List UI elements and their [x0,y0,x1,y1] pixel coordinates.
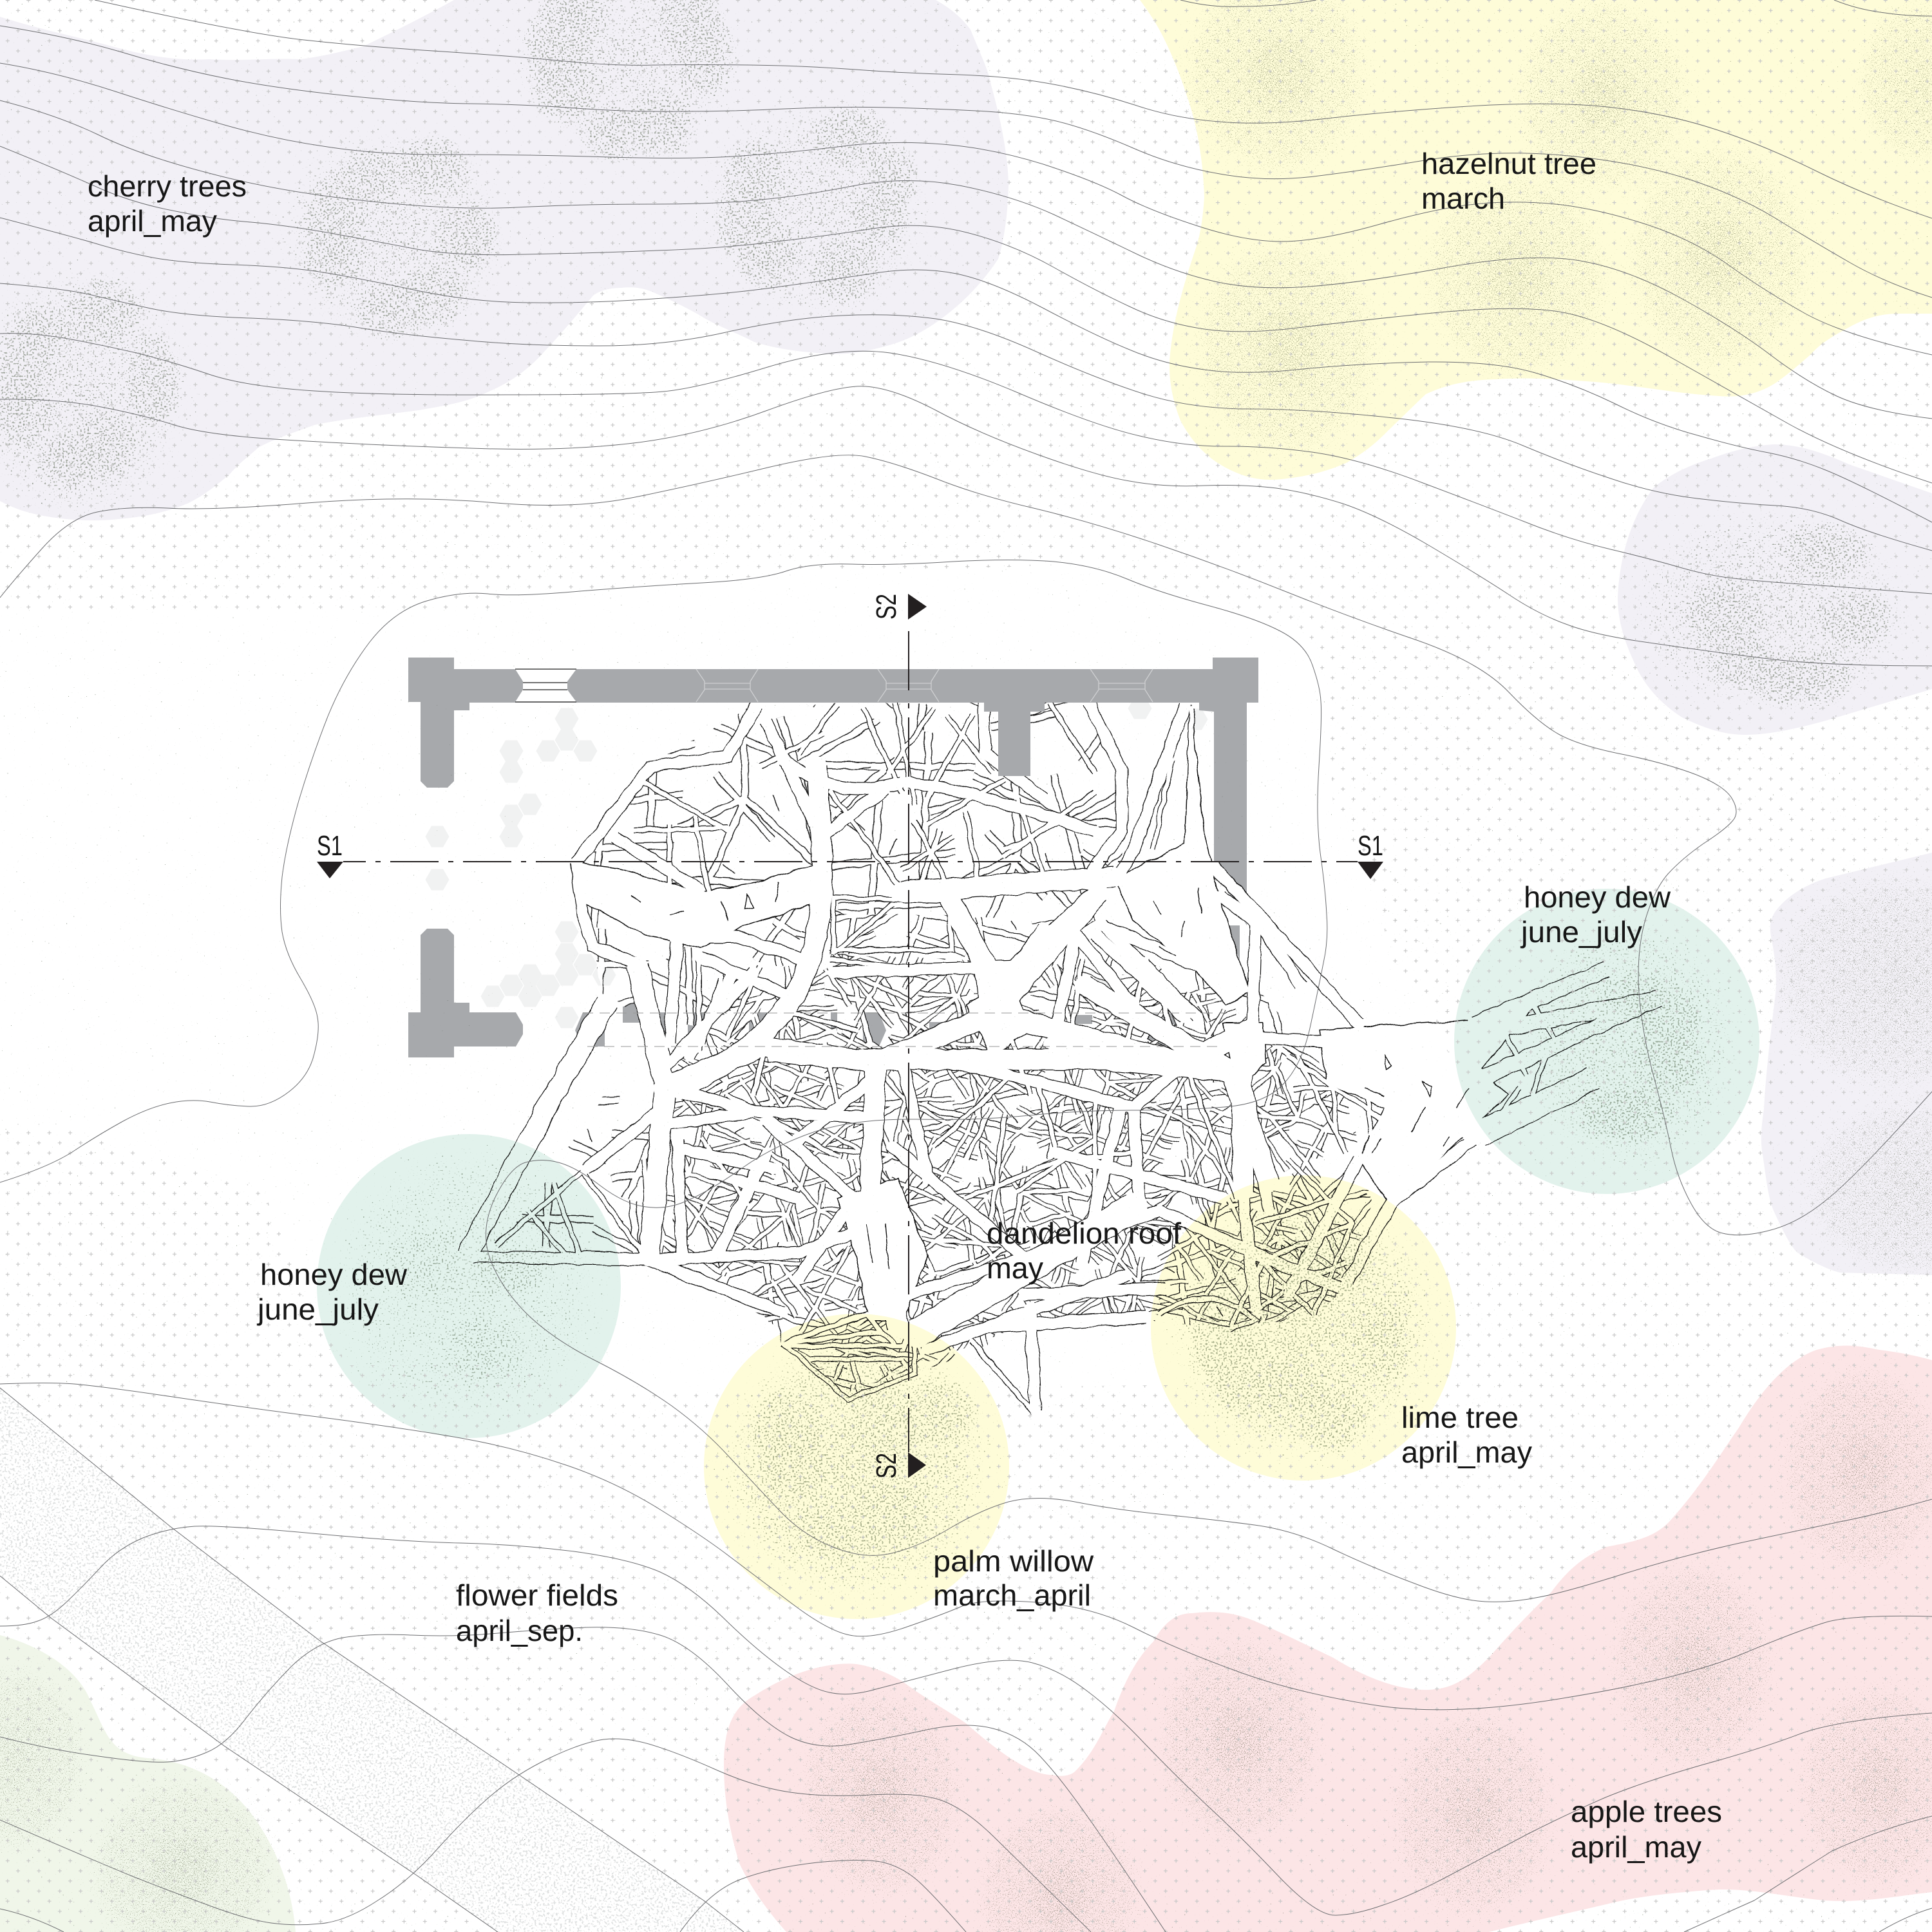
area: cherry trees [0,0,1009,520]
dandelion roof structure [467,702,1658,1413]
palm willow circle [704,1314,1009,1619]
area: lavender patch east upper [1618,444,1932,735]
label: apple trees: april_may [1571,1830,1701,1864]
label S1 west: S1 [317,830,343,862]
multiply circles: honey dew, palm willow, lime tree [317,889,1759,1619]
glazed opening [515,669,576,702]
lime tree circle [1151,1175,1456,1481]
area: green meadow corner [0,1635,296,1932]
section marker S1 east [1358,862,1383,879]
label: cherry trees: april_may [88,204,217,238]
label: cherry trees [88,169,247,238]
label: honey dew east: honey dew [1524,880,1671,914]
faint window outlines [696,669,1153,702]
honey dew circle west [317,1134,621,1438]
label: hazelnut tree [1421,147,1596,215]
roof: lattice lower-left [502,1095,663,1256]
label: dandelion roof: may [987,1251,1043,1285]
flower field strip [0,1388,744,1932]
section line S1 [317,830,1383,879]
section marker S2 south [908,1452,926,1478]
label: lime tree: lime tree [1401,1401,1519,1434]
section marker S2 north [908,594,927,620]
label: honey dew east: june_july [1520,915,1642,949]
speckled canopies in the circles [314,902,1752,1618]
roof: lattice lower overlay [670,953,1327,1391]
area: lavender patch east lower [1761,853,1932,1275]
label: flower fields [456,1578,618,1647]
dashed roof footprint [583,1013,1224,1046]
label: honey dew west: honey dew [260,1258,408,1291]
floor hexagon tiles [425,698,1208,1028]
roof: lattice upper [575,703,1122,1030]
honey dew circle east [1454,889,1759,1194]
label: dandelion roof: dandelion roof [987,1217,1181,1250]
building wall: north with corners and stub [408,658,1258,776]
label S1 east: S1 [1358,830,1383,862]
building walls: west, south and east [408,702,1247,1057]
label: palm willow: march_april [933,1578,1091,1612]
area: hazelnut tree [1140,0,1932,480]
section marker S1 west [317,862,343,878]
north wall mass [408,658,1258,776]
roof: surface details [631,882,1468,1269]
label: lime tree: april_may [1401,1435,1532,1469]
area: apple trees [724,1345,1932,1932]
label: honey dew west [256,1258,408,1326]
label: hazelnut tree: march [1421,182,1505,215]
roof: lattice lower [650,914,1372,1399]
label: honey dew west: june_july [256,1293,379,1326]
label: honey dew east [1520,880,1671,949]
roof: branch bodies [467,702,1658,1413]
label: hazelnut tree: hazelnut tree [1421,147,1596,180]
label: apple trees: apple trees [1571,1795,1722,1828]
roof: branch outlines [467,702,1658,1413]
section line S2 [871,594,927,1479]
label: lime tree [1401,1401,1532,1469]
label S2 north: S2 [871,594,902,620]
label: apple trees [1571,1795,1722,1864]
label: palm willow [933,1544,1094,1612]
label: palm willow: palm willow [933,1544,1094,1578]
speckled tree canopies on the large areas [0,0,1932,728]
label: dandelion roof [987,1217,1181,1285]
label: flower fields: april_sep. [456,1614,583,1647]
label: cherry trees: cherry trees [88,169,247,203]
label: flower fields: flower fields [456,1578,618,1612]
label S2 south: S2 [871,1453,902,1479]
